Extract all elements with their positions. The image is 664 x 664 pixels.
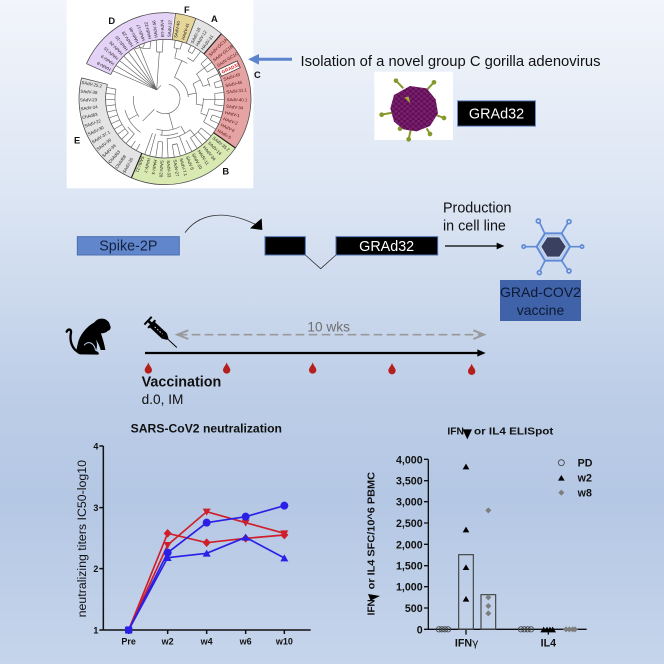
- tree leaf labels: HAdV-29: [121, 30, 134, 48]
- tree leaf labels: HAdV-7: [143, 158, 152, 174]
- panel: vaccination timeline: [67, 316, 486, 407]
- y axis tick labels: 4,000: [396, 454, 423, 466]
- icons: blood draws: [145, 362, 475, 375]
- tree leaf labels: SAdV-28: [159, 160, 164, 178]
- y axis tick labels: [396, 454, 423, 636]
- y axis tick labels: 3,000: [396, 497, 423, 509]
- bars: [459, 555, 496, 629]
- chart title: IFN: [447, 426, 464, 437]
- tree leaf labels: SAdV-35.2: [211, 135, 231, 153]
- x axis labels: IL4: [541, 638, 556, 650]
- y axis tick labels: 3,500: [396, 476, 423, 488]
- series: red diamonds: [129, 529, 288, 630]
- arrow: timeline axis: [145, 349, 486, 357]
- clade letters: F: [184, 5, 190, 15]
- legend: w8: [577, 488, 592, 500]
- tree leaf labels: SAdV-40: [173, 20, 181, 38]
- axes: [424, 459, 587, 635]
- clade letters: A: [211, 14, 218, 24]
- text: production in cell line: [443, 201, 512, 235]
- tree leaf labels: [80, 19, 248, 178]
- points: PD: [436, 627, 534, 632]
- tree leaf labels: HAdV-6: [220, 122, 236, 133]
- tree leaf labels: SAdV-27: [172, 159, 180, 177]
- tree leaf labels: SAdV-23: [80, 97, 98, 102]
- tree leaf labels: HAdV-26: [108, 40, 124, 56]
- tree leaf labels: ChAd83: [82, 112, 99, 120]
- box: Spike-2P: [77, 237, 179, 255]
- text: vaccination: Vaccination: [142, 375, 221, 391]
- tree leaf labels: HAdV-3: [151, 159, 158, 175]
- arrow: 10 week span: [177, 330, 484, 339]
- panel: adenovirus phylogenetic tree: [51, 0, 279, 212]
- axis tick labels: w6: [239, 636, 252, 646]
- tree leaf labels: SAdV-38: [80, 89, 98, 95]
- vector: GRAd32 genome with insertion site: [265, 237, 438, 269]
- arrow: to vaccine: [445, 243, 504, 249]
- clade letters: C: [254, 70, 261, 80]
- tree leaf labels: HAdV-5: [217, 128, 233, 140]
- y axis tick labels: 500: [405, 603, 423, 615]
- y axis title: [367, 472, 380, 615]
- ring outline: [51, 0, 279, 212]
- axis tick labels: 4: [93, 441, 98, 451]
- icon: adenovirus particle: [374, 72, 453, 141]
- axis tick labels: 1: [93, 625, 98, 635]
- tree leaf labels: SAdV-10: [191, 152, 203, 170]
- tree leaf labels: SAdV-39: [96, 137, 113, 152]
- box: GRAd-COV2 vaccine: [500, 280, 581, 321]
- tree leaf labels: SAdV-31.1: [226, 87, 248, 95]
- legend: PD: [578, 457, 593, 469]
- GRAd32 highlighted label: GRAD32: [221, 62, 240, 75]
- tree leaf labels: HAdV-1: [225, 110, 241, 118]
- icon: vaccine particle: [522, 219, 584, 275]
- tree leaf labels: SAdV-45: [225, 80, 243, 88]
- tree leaf labels: HAdV-8: [96, 60, 112, 72]
- tree leaf labels: SAdV-14: [207, 140, 223, 156]
- x axis labels: [455, 637, 556, 650]
- tree leaf labels: SAdV-34: [226, 104, 244, 111]
- tree leaf labels: SAdV-GC1C: [216, 51, 239, 68]
- box: Spike-2P: Spike-2P: [99, 239, 157, 255]
- tree leaf labels: SAdV-40.1: [227, 97, 248, 102]
- tree leaf labels: HAdV-17: [135, 23, 146, 42]
- tree leaf labels: SAdV-36: [101, 143, 117, 158]
- tree leaf labels: SAdV-GC1B: [212, 44, 234, 63]
- tree leaf labels: HAdV-9: [100, 54, 115, 66]
- label: GRAd32: GRAd32: [469, 106, 524, 122]
- legend: w2: [577, 472, 592, 484]
- vector: GRAd32 genome with insertion site: GRAd32: [359, 239, 414, 255]
- points: w2: [463, 464, 556, 632]
- clade letters: E: [74, 135, 80, 145]
- axis tick labels: 3: [93, 503, 98, 513]
- text: production in cell line: Production: [443, 201, 512, 217]
- chart title: [447, 426, 554, 439]
- box: GRAd-COV2 vaccine: GRAd-COV2: [500, 284, 581, 300]
- y axis title: neutralizing titers IC50-log10: [75, 460, 89, 617]
- tree leaf labels: HAdV-2: [223, 116, 239, 126]
- axes: [99, 446, 311, 634]
- chart title: SARS-CoV2 neutralization: [131, 422, 282, 436]
- legend: [558, 457, 593, 500]
- tree leaf labels: HAdV-12: [194, 29, 208, 47]
- arrow: from tree to isolation text: [248, 54, 292, 65]
- arrow: insertion of spike: [185, 215, 262, 233]
- chart: SARS-CoV2 neutralization: [75, 422, 311, 646]
- text: vaccination: [142, 375, 221, 407]
- axis tick labels: w2: [161, 636, 174, 646]
- clade letters: D: [108, 16, 115, 26]
- x axis labels: IFNγ: [455, 637, 478, 650]
- axis tick labels: 2: [93, 564, 98, 574]
- y axis tick labels: 1,000: [396, 582, 423, 594]
- tree leaf labels: HAdV-41: [180, 22, 190, 40]
- label: GRAd32: [458, 101, 536, 126]
- clade letters: B: [222, 167, 229, 177]
- tree leaf labels: SAdV-30: [87, 125, 105, 137]
- clade letters: [74, 5, 261, 177]
- tree leaf labels: SAdV-37.1: [91, 129, 112, 144]
- y axis title: IFN: [367, 599, 378, 615]
- tree leaf labels: SAdV-24: [80, 104, 98, 111]
- box: GRAd-COV2 vaccine: vaccine: [517, 302, 564, 318]
- label: 10 wks: 10 wks: [307, 320, 350, 335]
- icon: syringe: [144, 316, 180, 351]
- tree leaf labels: HAdV-15: [102, 46, 119, 61]
- tree leaf labels: SAdV-21: [134, 155, 145, 174]
- tree leaf labels: HAdV-19: [114, 35, 129, 52]
- axis tick labels: w4: [200, 636, 213, 646]
- tree leaf labels: HAdV-11: [197, 149, 210, 166]
- tree leaf labels: ChAd63: [107, 149, 122, 164]
- y axis tick labels: 0: [417, 624, 423, 636]
- tree leaf labels: HAdV-22: [143, 21, 152, 39]
- panel: vector construction: [77, 201, 512, 269]
- heading: isolation text: Isolation of a novel group C gorilla adenovirus: [300, 54, 600, 70]
- GRAd32 highlighted label: [218, 61, 241, 76]
- tree leaf labels: SAdV-18: [190, 26, 202, 44]
- tree leaf labels: HAdV-48: [128, 26, 140, 44]
- tree leaf labels: SAdV-33: [166, 160, 172, 178]
- tree leaf labels: SAdV-GC1A: [208, 37, 228, 58]
- ring: clade colour bands: [62, 0, 268, 201]
- tree leaf labels: SAdV-22: [84, 118, 102, 129]
- tree leaf labels: SAdV-25.2: [81, 80, 103, 89]
- points: w8: [485, 507, 578, 632]
- chart: IFN or IL4 ELISpot: [367, 426, 593, 650]
- tree leaf labels: SAdV-7.1: [179, 158, 188, 177]
- series: blue triangles: [125, 534, 288, 634]
- tree leaf labels: HAdV-56: [151, 20, 159, 38]
- axis tick labels: [93, 441, 293, 646]
- chart title: or IL4 ELISpot: [474, 426, 554, 437]
- tree leaf labels: SAdV-37: [167, 19, 173, 37]
- icon: monkey: [67, 319, 111, 355]
- series: blue circles: [129, 502, 288, 630]
- axis tick labels: w10: [275, 636, 293, 646]
- y axis tick labels: 1,500: [396, 561, 423, 573]
- tree leaf labels: SAdV-25: [121, 156, 134, 174]
- tree branches: [94, 28, 236, 169]
- tree leaf labels: SAdV-43: [223, 72, 241, 82]
- text: production in cell line: in cell line: [443, 219, 506, 235]
- tree leaf labels: HAdV-34: [202, 145, 217, 162]
- y axis tick labels: 2,500: [396, 518, 423, 530]
- y axis title: or IL4 SFC/10^6 PBMC: [367, 472, 378, 589]
- y axis tick labels: 2,000: [396, 539, 423, 551]
- tree leaf labels: SAdV-5: [185, 155, 195, 171]
- tree leaf labels: ChAd68: [114, 153, 127, 170]
- tree leaf labels: BT-AdV4: [160, 19, 165, 37]
- axis tick labels: Pre: [121, 636, 136, 646]
- tree leaf labels: HAdV-31: [200, 34, 215, 51]
- series: red triangles: [129, 509, 288, 630]
- text: vaccination: d.0, IM: [142, 392, 183, 407]
